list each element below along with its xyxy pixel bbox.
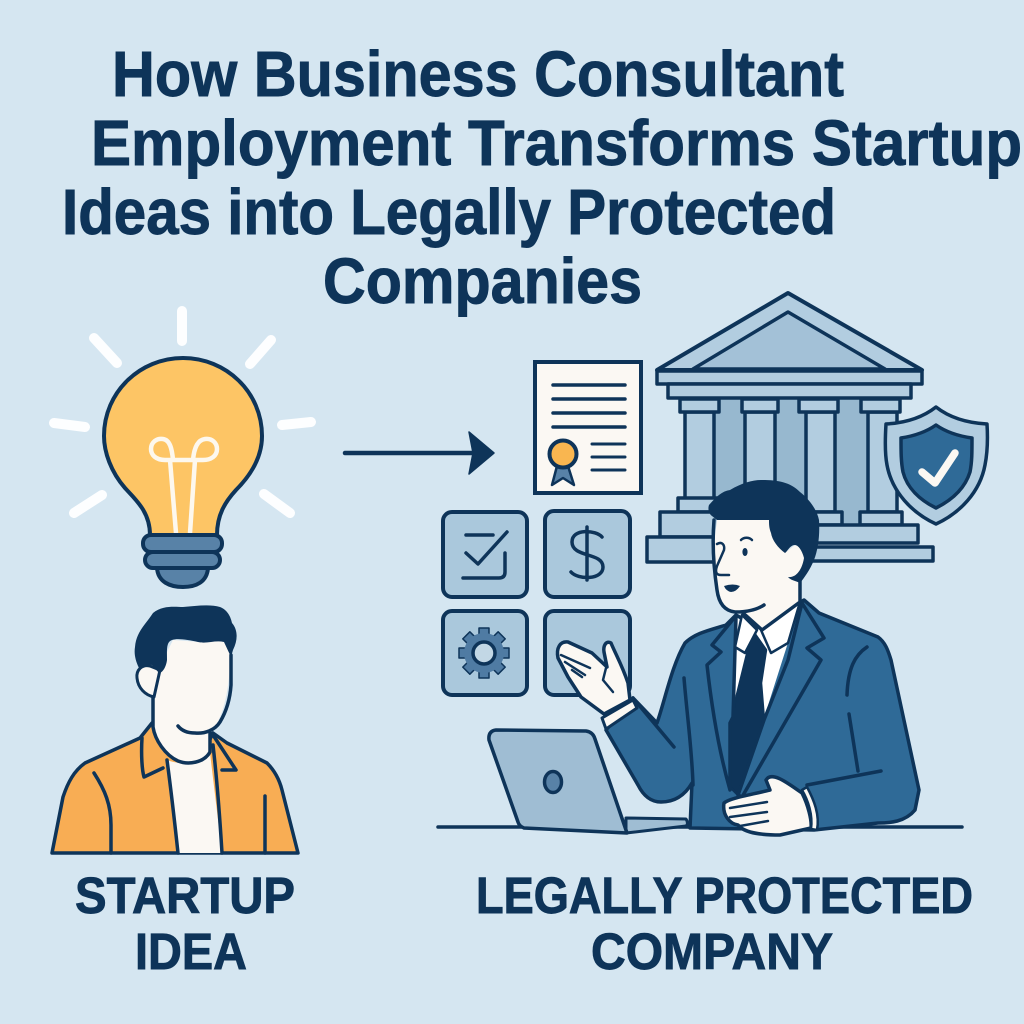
- title: Ideas into Legally Protected: [62, 176, 836, 248]
- arrow: [345, 432, 494, 474]
- t-shirt: [167, 753, 222, 853]
- right lapel: [738, 603, 824, 797]
- hair: [708, 480, 819, 583]
- icon tile: checklist: [443, 512, 527, 597]
- suit: [606, 600, 919, 830]
- raised hand cuff: [602, 700, 637, 729]
- ear: [785, 545, 805, 578]
- raised hand: [557, 642, 630, 714]
- hair: [135, 605, 237, 673]
- title: Companies: [323, 245, 642, 317]
- collar: [735, 615, 757, 653]
- icon: laptop: [489, 730, 688, 833]
- icon tile: blank behind hand: [545, 611, 630, 695]
- figure: consultant: [557, 480, 919, 835]
- icon tile: dollar: [545, 511, 630, 597]
- ear: [137, 666, 160, 697]
- jacket: [52, 723, 298, 853]
- lower hand cuff: [802, 787, 818, 830]
- icon: bank building: [647, 293, 933, 562]
- label: legally protected company: [476, 867, 973, 980]
- icon: light bulb: [54, 311, 311, 587]
- facial features: [716, 538, 752, 575]
- tie: [730, 630, 766, 797]
- label: legally protected company: COMPANY: [591, 923, 833, 980]
- shirt: [733, 605, 800, 718]
- icon: certificate: [535, 362, 641, 493]
- face: [714, 520, 800, 630]
- left lapel: [707, 617, 736, 790]
- label: startup idea: STARTUP: [75, 867, 295, 924]
- figure: founder: [52, 605, 298, 853]
- title: [62, 38, 1022, 317]
- label: legally protected company: LEGALLY PROTECTED: [476, 867, 973, 924]
- suit seams: [633, 647, 881, 785]
- label: startup idea: IDEA: [135, 923, 247, 980]
- icon: shield: [885, 407, 987, 524]
- lower hand: [724, 777, 811, 835]
- icon tile: gear: [443, 611, 527, 695]
- label: startup idea: [75, 867, 295, 980]
- title: How Business Consultant: [112, 38, 844, 110]
- neck and face: [153, 640, 230, 763]
- table line: [438, 825, 962, 829]
